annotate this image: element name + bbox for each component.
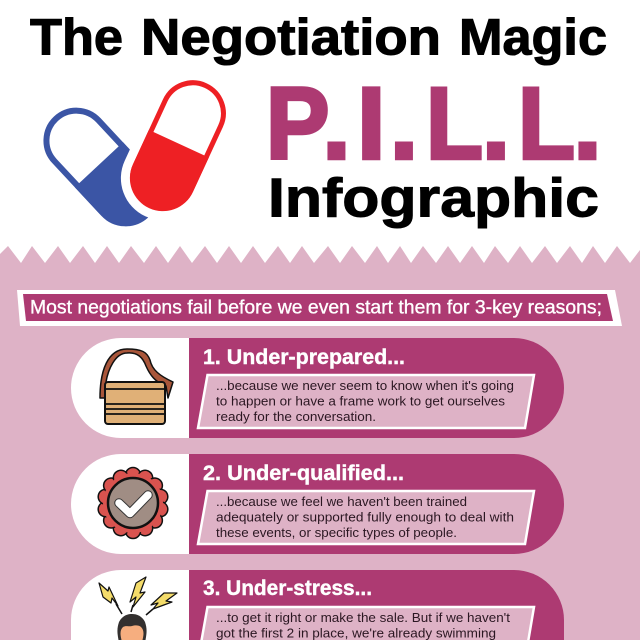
text box: Under-prepared explanation: ready for the conversation. [216,409,376,424]
text box: Under-qualified explanation: these events, or specific types of people. [216,525,457,540]
text box: Under-qualified explanation: adequately or supported fully enough to deal with [216,510,514,524]
heading: P.I.L.L. [266,65,602,180]
text box: Under-prepared explanation [198,375,534,428]
title: The Negotiation Magic: Negotiation [141,8,441,66]
panel: 2. Under-qualified [71,454,564,554]
text box: Under-stress explanation: ...to get it right or make the sale. But if we haven't [216,610,510,625]
panel: pink zigzag background [0,246,640,640]
banner: intro statement [17,290,622,326]
text box: Under-prepared explanation: ...because we never seem to know when it's going [216,378,514,393]
title: The Negotiation Magic: The [30,8,123,66]
heading: P.I.L.L.: . [573,66,602,180]
panel: 1. Under-prepared [71,338,564,438]
heading: Under-stress: 3. Under-stress... [203,577,372,600]
heading: P.I.L.L.: L [426,65,483,180]
heading: Infographic: Infographic [268,166,599,228]
text box: Under-qualified explanation: ...because we feel we haven't been trained [216,494,467,509]
title: The Negotiation Magic [30,8,607,66]
text box: Under-prepared explanation: to happen or have a frame work to get ourselves [216,394,505,408]
heading: P.I.L.L.: P [266,65,329,180]
banner: intro statement: Most negotiations fail before we even start them for 3-key reasons; [30,296,602,318]
heading: P.I.L.L.: . [390,66,418,180]
heading: Under-prepared: 1. Under-prepared... [203,346,405,369]
panel: 3. Under-stress [71,570,564,640]
icon: red pill [107,57,249,234]
icon: stressed head with lightning bolts [99,577,177,640]
heading: Under-qualified: 2. Under-qualified... [203,462,404,485]
icon: blue and red pills [32,57,249,240]
heading: P.I.L.L.: I [357,66,385,180]
icon: messenger bag [100,349,173,424]
title: The Negotiation Magic: Magic [459,8,607,66]
text box: Under-stress explanation [198,607,534,640]
heading: P.I.L.L.: . [482,66,510,180]
heading: P.I.L.L.: . [322,66,351,180]
icon: blue pill [32,96,172,240]
heading: P.I.L.L.: L [518,65,575,180]
icon: rosette with check mark [97,468,169,538]
text box: Under-qualified explanation [198,491,534,544]
